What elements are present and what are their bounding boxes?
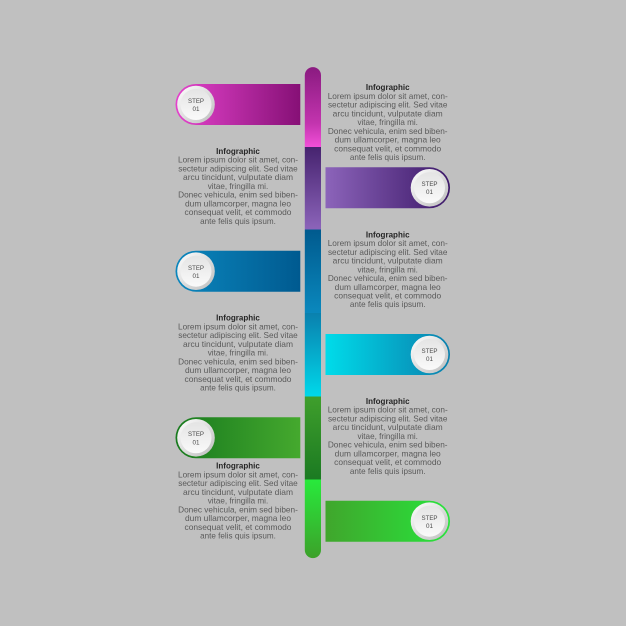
text block: left 1 [178,146,298,226]
text block: right 2: Donec vehicula, enim sed biben- [328,273,448,283]
timeline segment: blue [305,230,321,313]
timeline segment: magenta [305,67,321,147]
text block: right 2: ante felis quis ipsum. [350,299,426,309]
step card: blue [176,251,300,292]
text block: right 2: dum ullamcorper, magna leo [335,282,441,292]
text block: left 3: Donec vehicula, enim sed biben- [178,504,298,514]
text block: left 2: consequat velit, et commodo [184,374,292,384]
text block: right 3: sectetur adipiscing elit. Sed vitae [328,413,448,423]
text block: left 3: arcu tincidunt, vulputate diam [183,487,293,497]
text block: right 1: Donec vehicula, enim sed biben- [328,126,448,136]
text block: right 1: sectetur adipiscing elit. Sed vitae [328,100,448,110]
text block: right 1: dum ullamcorper, magna leo [335,135,441,145]
text block: right 2: Lorem ipsum dolor sit amet, con- [328,238,448,248]
timeline segment: purple [305,147,321,230]
text block: right 3: Infographic [366,396,410,406]
text block: left 2: Lorem ipsum dolor sit amet, con- [178,321,298,331]
step card: purple: 01 [426,189,433,196]
text block: right 2: sectetur adipiscing elit. Sed vitae [328,247,448,257]
text block: right 1 [328,82,448,162]
step card: dark green: STEP [188,431,204,438]
text block: right 2: consequat velit, et commodo [334,290,442,300]
step card: cyan: STEP [422,348,438,355]
text block: left 2: vitae, fringilla mi. [208,348,268,358]
text block: right 2: vitae, fringilla mi. [357,264,418,274]
text block: left 1: vitae, fringilla mi. [208,181,268,191]
text block: right 1: ante felis quis ipsum. [350,152,426,162]
text block: left 2 [178,313,298,392]
step card: purple [326,167,450,208]
text block: left 1: sectetur adipiscing elit. Sed vitae [178,163,298,173]
text block: left 3: dum ullamcorper, magna leo [185,513,291,523]
step card: blue: 01 [192,273,200,280]
text block: left 1: arcu tincidunt, vulputate diam [183,172,293,182]
text block: right 1: Lorem ipsum dolor sit amet, con- [328,91,448,101]
timeline segment: dark green [305,396,321,480]
text block: left 3: Lorem ipsum dolor sit amet, con- [178,469,298,479]
timeline segment: bright green [305,480,321,558]
step card: dark green: 01 [192,440,200,446]
step card: purple: STEP [422,181,438,188]
text block: left 1: ante felis quis ipsum. [200,216,276,226]
text block: left 1: Lorem ipsum dolor sit amet, con- [178,155,298,165]
text block: right 3: Donec vehicula, enim sed biben- [328,440,448,450]
text block: left 2: sectetur adipiscing elit. Sed vitae [178,330,298,340]
text block: right 1: consequat velit, et commodo [334,143,442,153]
text block: left 2: ante felis quis ipsum. [200,382,276,392]
text block: right 2 [328,229,448,309]
step card: magenta [175,84,300,125]
text block: left 1: Donec vehicula, enim sed biben- [178,190,298,200]
step card: bright green: 01 [426,523,433,530]
text block: left 2: dum ullamcorper, magna leo [185,365,291,375]
central timeline bar [305,67,321,558]
text block: right 3: dum ullamcorper, magna leo [335,448,441,458]
text block: right 3: arcu tincidunt, vulputate diam [333,422,443,432]
text block: right 3: Lorem ipsum dolor sit amet, con- [328,405,448,415]
step card: magenta: 01 [192,106,200,113]
text block: left 3 [178,461,298,540]
text block: right 2: arcu tincidunt, vulputate diam [333,256,443,266]
step card: cyan [326,334,450,375]
text block: right 1: arcu tincidunt, vulputate diam [333,108,443,118]
text block: left 1: dum ullamcorper, magna leo [185,198,291,208]
step card: cyan: 01 [426,356,433,363]
text block: left 2: arcu tincidunt, vulputate diam [183,339,293,349]
text block: right 3: ante felis quis ipsum. [350,466,426,476]
text block: left 2: Donec vehicula, enim sed biben- [178,356,298,366]
text block: right 3: vitae, fringilla mi. [357,431,418,441]
text block: left 2: Infographic [216,313,260,323]
text block: right 3 [328,396,448,476]
step card: bright green: STEP [422,515,438,522]
step card: dark green [175,417,300,458]
text block: right 3: consequat velit, et commodo [334,457,442,467]
text block: left 3: vitae, fringilla mi. [208,496,268,506]
step card: magenta: STEP [188,98,204,105]
text block: left 3: sectetur adipiscing elit. Sed vitae [178,478,298,488]
text block: left 3: Infographic [216,461,260,471]
text block: right 1: vitae, fringilla mi. [357,117,418,127]
text block: left 1: Infographic [216,146,260,156]
step card: blue: STEP [188,265,204,272]
timeline segment: cyan [305,313,321,396]
text block: left 1: consequat velit, et commodo [184,207,292,217]
text block: right 1: Infographic [366,82,410,92]
text block: left 3: consequat velit, et commodo [184,522,292,532]
text block: right 2: Infographic [366,229,410,239]
step card: bright green [326,501,450,542]
text block: left 3: ante felis quis ipsum. [200,530,276,540]
